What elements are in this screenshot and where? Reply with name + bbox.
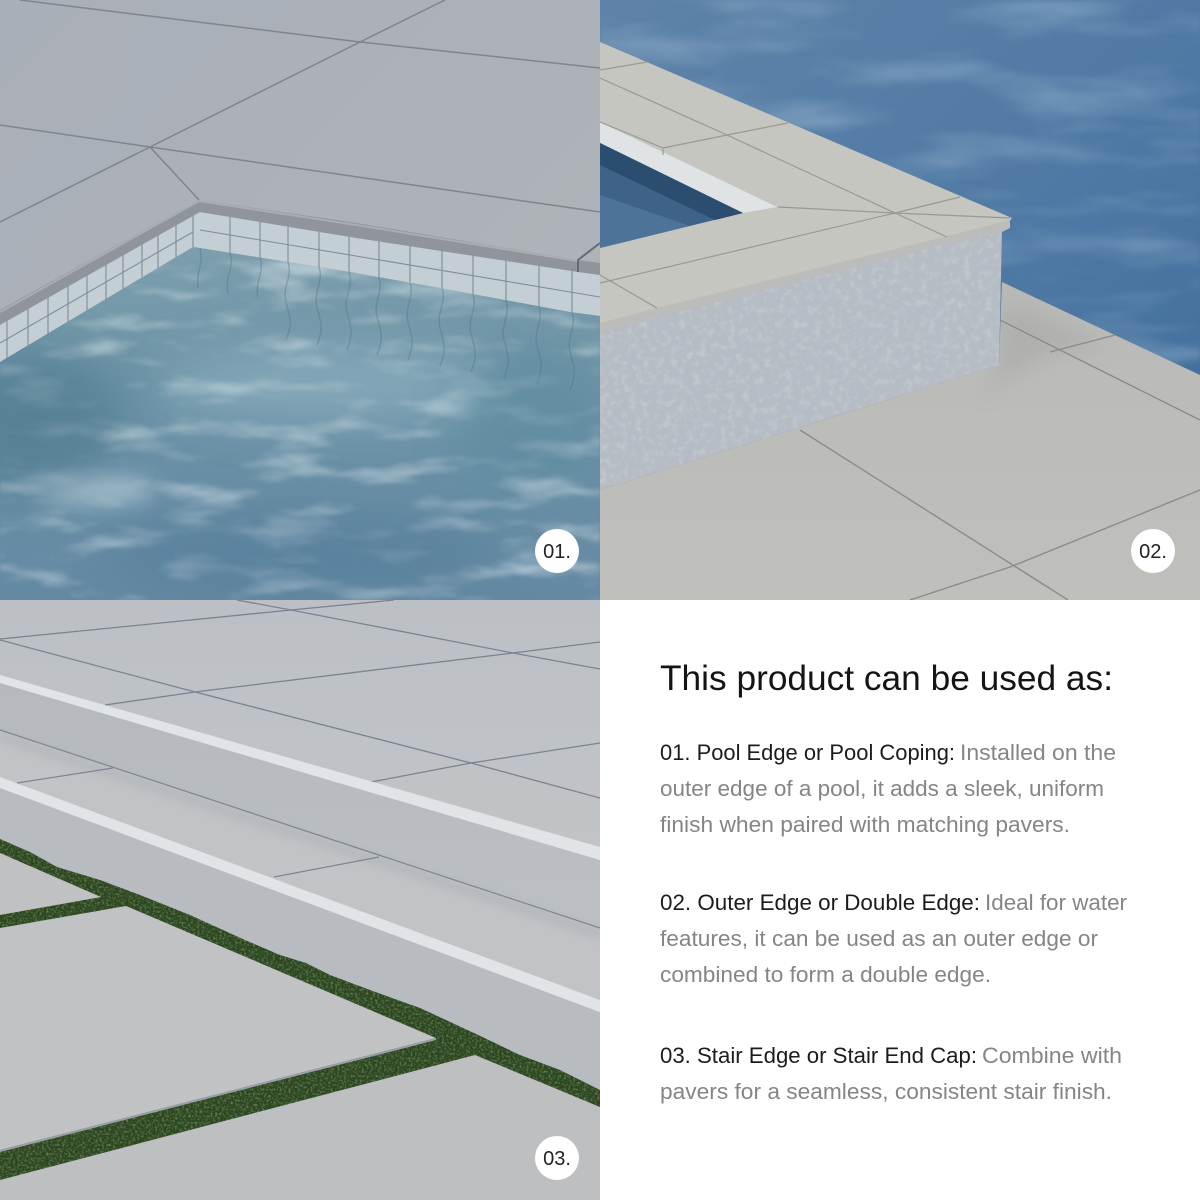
- lower tread: [331, 900, 600, 1000]
- white stair nosing upper: [0, 675, 600, 860]
- text block: 02 outer edge: features, it can be used as an outer edge or: [660, 926, 1099, 951]
- stepping paver 1: [0, 853, 101, 915]
- text block: 01 pool edge: [660, 740, 1116, 837]
- text block: 03 stair edge: pavers for a seamless, consistent stair finish.: [660, 1079, 1112, 1104]
- paver joint lines: [0, 0, 600, 222]
- text block: 02 outer edge: 02. Outer Edge or Double Edge:: [660, 890, 980, 915]
- upper paver joints: [0, 600, 600, 798]
- wall shadow on ground: [999, 302, 1070, 368]
- panel: 03 stair edge photo: [0, 600, 600, 1200]
- water background: [600, 0, 1200, 490]
- paver 2 edge: [0, 1039, 436, 1151]
- text block: 01 pool edge: 01. Pool Edge or Pool Coping:: [660, 740, 955, 765]
- text block: 01 pool edge: outer edge of a pool, it adds a sleek, uniform: [660, 776, 1104, 801]
- pool water: [0, 240, 600, 600]
- heading: This product can be used as:: [660, 659, 1113, 698]
- tread shadow: [0, 730, 600, 940]
- badge 03: 03.: [543, 1148, 571, 1170]
- upper paving: [0, 600, 600, 860]
- grass: [0, 825, 600, 1200]
- text block: 02 outer edge: [660, 890, 1127, 987]
- ground paver joints: [800, 320, 1200, 600]
- panel: 01 pool coping photo: [0, 0, 600, 600]
- text block: 03 stair edge: Combine with: [982, 1043, 1122, 1068]
- coping nose edge: [0, 200, 600, 325]
- pool tile band: [0, 212, 600, 362]
- upper riser: [0, 683, 600, 928]
- stepping paver 2: [0, 906, 436, 1150]
- text block: 01 pool edge: finish when paired with matching pavers.: [660, 812, 1070, 837]
- stepping paver 3: [0, 1055, 600, 1200]
- text block: 02 outer edge: combined to form a double edge.: [660, 962, 991, 987]
- lower riser: [0, 786, 600, 1090]
- text block: 01 pool edge: Installed on the: [960, 740, 1116, 765]
- coping front edge: [600, 220, 1010, 332]
- inner water channel: [600, 122, 777, 248]
- badge 03: [535, 1136, 579, 1180]
- panel: 02 outer edge photo: [600, 0, 1200, 600]
- coping paving surface: [0, 0, 600, 362]
- badge 02: [1131, 529, 1175, 573]
- badge 01: [535, 529, 579, 573]
- text block: 03 stair edge: [660, 1043, 1122, 1104]
- text block: 03 stair edge: 03. Stair Edge or Stair End Cap:: [660, 1043, 977, 1068]
- coping joints: [600, 62, 1010, 308]
- badge 02: 02.: [1139, 541, 1167, 563]
- ground paving: [600, 282, 1200, 600]
- lower tread joints: [0, 730, 600, 928]
- badge 01: 01.: [543, 541, 571, 563]
- coping top surface: [600, 42, 1012, 332]
- text block: 02 outer edge: Ideal for water: [985, 890, 1127, 915]
- concrete wall: [600, 225, 1010, 495]
- white stair nosing lower: [0, 777, 600, 1012]
